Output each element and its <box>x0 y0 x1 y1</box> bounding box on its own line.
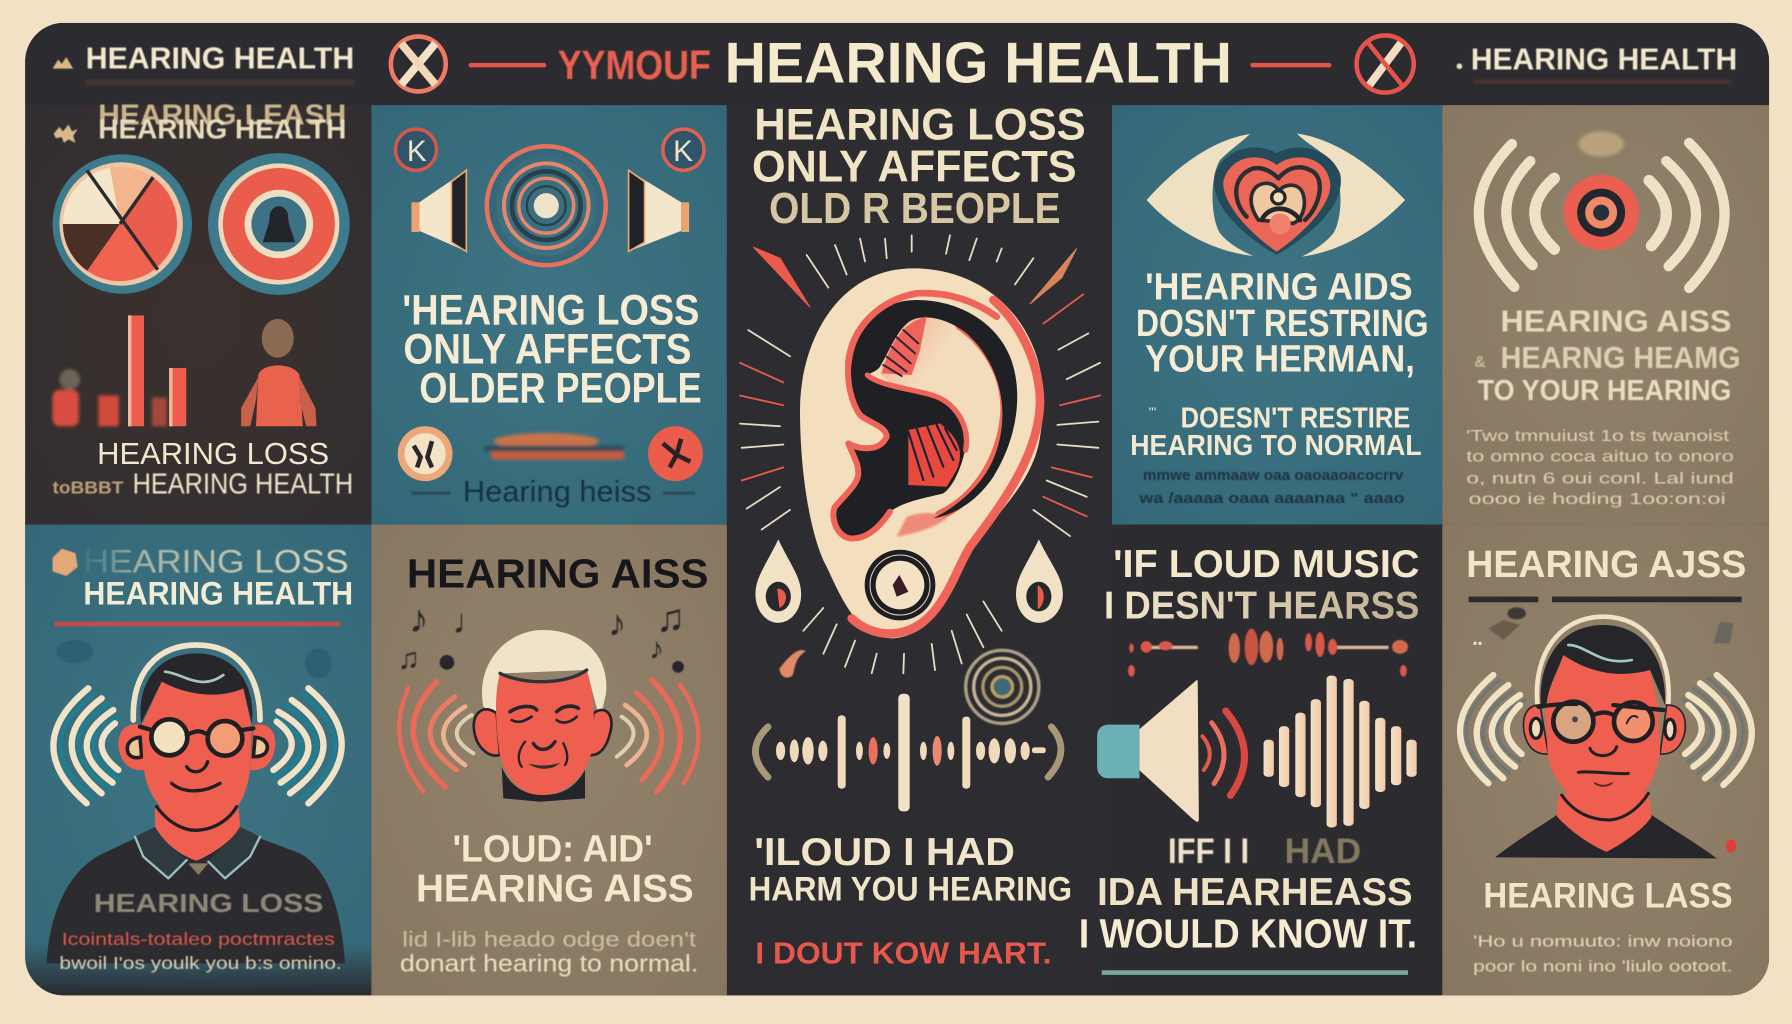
myth heading: & <box>1474 354 1486 371</box>
fine print: lid I-lib heado odge doen't <box>402 926 696 951</box>
icon: figure badge right <box>648 426 703 481</box>
blurred strip <box>485 433 624 459</box>
coral punchline: I DOUT KOW HART. <box>755 935 1051 970</box>
icon: speaker left <box>411 170 466 251</box>
icon: badge left: K <box>407 135 427 168</box>
arcs <box>1202 711 1244 795</box>
panel: younger person <box>25 525 371 995</box>
music notes: ♩ <box>453 603 487 641</box>
dark rules <box>1469 597 1742 602</box>
myth statement: HARM YOU HEARING <box>749 871 1072 909</box>
music notes: ♫ <box>398 643 420 676</box>
myth heading: ONLY AFFECTS <box>403 325 691 372</box>
sub statement: HEARING TO NORMAL <box>1130 430 1422 462</box>
myth statement <box>1079 831 1417 956</box>
fine print: 'Two tmnuiust 1o ts twanoist <box>1466 428 1730 445</box>
upper hatch <box>882 317 927 376</box>
music notes: ♪ <box>608 602 626 643</box>
caption: hearing health <box>52 472 352 494</box>
icon: drop right <box>1016 539 1063 623</box>
caption: hearing health: HEARING HEALTH <box>133 469 353 501</box>
red dot <box>1726 839 1736 853</box>
headband <box>1537 617 1669 703</box>
panel: charts <box>25 100 371 525</box>
fine print: poor lo noni ino 'liulo ootoot. <box>1473 958 1733 975</box>
music notes: ♪ <box>649 632 664 665</box>
myth heading: 'HEARING AIDS <box>1145 265 1413 307</box>
nose and mouth <box>187 762 208 772</box>
panel: loud music <box>1079 525 1442 995</box>
icon: hexagon mark <box>53 549 78 576</box>
ears <box>1523 705 1548 754</box>
caption: hearing health: toBBBT <box>53 478 124 498</box>
myth heading: DOSN'T RESTRING <box>1136 302 1429 344</box>
sound arcs <box>399 680 698 792</box>
myth heading: HEARNG HEAMG <box>1501 340 1741 375</box>
sub statement <box>1130 402 1422 462</box>
person figure <box>241 319 317 426</box>
bar chart <box>53 315 186 426</box>
heading: HEARING LOSS <box>83 544 349 580</box>
neck <box>155 803 240 861</box>
ears <box>474 709 500 756</box>
ear cavity <box>835 300 1017 539</box>
caption: hearing heiss <box>411 480 696 508</box>
myth heading: YOUR HERMAN, <box>1145 337 1415 379</box>
headband <box>133 645 260 720</box>
title prefix: YYMOUF <box>558 42 711 88</box>
face <box>1545 655 1660 809</box>
music notes <box>398 597 686 680</box>
icon: target dot <box>1563 175 1639 250</box>
pie chart <box>53 154 192 294</box>
overlapping heading: HEARING HEALTH <box>98 113 346 144</box>
myth statement: 'ILOUD I HAD <box>754 831 1015 874</box>
icon: crossed circle right <box>1357 35 1414 93</box>
equalizer bars <box>1264 675 1417 828</box>
blurred fine print: mmwe ammaaw oaa oaoaaoacocrrv <box>1143 468 1404 484</box>
heading: HEARING HEALTH <box>83 576 353 612</box>
ear canal ring <box>865 550 935 620</box>
icon: crossed circle left <box>391 37 446 91</box>
myth heading <box>754 108 1084 224</box>
neck <box>1557 792 1652 852</box>
caption: HEARING LASS <box>1483 875 1733 915</box>
header bar <box>25 23 1769 105</box>
music notes: ● <box>670 649 686 680</box>
panel: myth older people <box>371 105 727 525</box>
fine print: oooo ie hoding 1oo:on:oi <box>1469 491 1726 508</box>
fine print: donart hearing to normal. <box>400 950 698 977</box>
panel: older person <box>371 525 727 995</box>
glasses <box>1553 702 1593 742</box>
heading <box>1104 543 1419 627</box>
icon: speaker <box>1097 680 1199 822</box>
fine print <box>1473 933 1733 975</box>
icon: note accent <box>779 650 806 678</box>
music notes: ♪ <box>409 598 429 641</box>
myth heading: ONLY AFFECTS <box>752 143 1077 192</box>
icon: ear illustration <box>800 268 1043 638</box>
shirt caption: HEARING LOSS <box>94 888 323 918</box>
header left label <box>53 41 354 85</box>
myth heading <box>404 294 700 403</box>
sub statement: DOESN'T RESTIRE <box>1181 402 1410 434</box>
overlapping heading <box>53 104 346 144</box>
portrait: man with glasses <box>1460 607 1752 858</box>
main title: HEARING HEALTH <box>725 31 1232 95</box>
myth statement <box>749 831 1072 909</box>
icon: badge left <box>395 129 437 170</box>
sub statement: ''' <box>1149 405 1156 420</box>
myth heading: TO YOUR HEARING <box>1478 375 1731 407</box>
icon: badge right <box>663 129 704 170</box>
icon: eye and heart <box>1147 133 1405 257</box>
myth statement: 'LOUD: AID' <box>453 828 653 870</box>
icon: small rings <box>966 650 1039 723</box>
hair <box>1541 625 1665 705</box>
myth statement: IFF I I <box>1168 831 1249 871</box>
sound rays <box>740 235 1100 673</box>
red rule <box>54 622 341 626</box>
small blurred mark <box>1578 131 1624 157</box>
caption: hearing loss: HEARING LOSS <box>97 436 329 471</box>
icon: speaker right <box>629 170 689 251</box>
myth heading: OLDER PEOPLE <box>419 364 702 411</box>
myth statement: HAD <box>1285 831 1361 871</box>
blurred marks <box>1488 607 1733 643</box>
ears <box>118 724 145 770</box>
target chart <box>208 153 350 295</box>
myth statement: I WOULD KNOW IT. <box>1079 910 1417 956</box>
sound waveform <box>755 694 1061 811</box>
dark shirt base <box>25 943 371 995</box>
sound arcs <box>53 688 342 803</box>
overlapping heading: HEARING LEASH <box>98 100 346 132</box>
red rule right <box>1250 63 1331 67</box>
music notes: ♫ <box>656 597 685 640</box>
music notes: ● <box>437 642 457 680</box>
portrait: man with glasses <box>47 640 345 963</box>
panel: ear centerpiece <box>727 100 1112 995</box>
teal rule <box>1102 970 1408 975</box>
face <box>496 670 594 795</box>
icon: figure badge left <box>398 426 453 481</box>
blurred fine print: wa /aaaaa oaaa aaaanaa " aaao <box>1138 491 1405 507</box>
icon: sound target <box>487 146 606 265</box>
myth heading: HEARING LOSS <box>754 100 1086 149</box>
hair <box>140 653 252 723</box>
panel: person listening <box>1442 525 1769 995</box>
torso <box>47 827 345 963</box>
portrait: older man <box>399 630 698 802</box>
inner peach bowl <box>880 318 952 387</box>
icon: badge right: K <box>673 135 693 168</box>
heading: HEARING AJSS <box>1466 543 1746 585</box>
heading: HEARING AISS <box>407 550 709 596</box>
fine print: 'Ho u nomuuto: inw noiono <box>1473 933 1733 950</box>
panel: myth hearing aids <box>1112 105 1442 525</box>
myth heading: OLD R BEOPLE <box>769 185 1061 233</box>
myth heading <box>1136 265 1429 379</box>
cream fine print: bwoil I'os youlk you b:s omino. <box>59 953 342 973</box>
face <box>142 682 252 825</box>
myth statement <box>416 828 694 911</box>
myth statement: HEARING AISS <box>416 868 694 911</box>
nose and mouth <box>1590 747 1617 756</box>
header left label: HEARING HEALTH <box>86 41 354 76</box>
glasses <box>151 719 187 755</box>
heading: I DESN'T HEARSS <box>1104 584 1419 627</box>
heading: 'IF LOUD MUSIC <box>1113 543 1419 586</box>
icon: drop left <box>755 539 801 623</box>
lower hatch <box>908 423 960 487</box>
myth heading: 'HEARING LOSS <box>402 287 699 334</box>
neck <box>502 767 585 802</box>
sound arcs and bars <box>1202 675 1417 828</box>
myth heading <box>1474 303 1741 407</box>
torso <box>1495 815 1717 858</box>
blurred fine print <box>1138 468 1405 507</box>
header right label: HEARING HEALTH <box>1471 42 1737 77</box>
fine print <box>400 926 698 977</box>
sound arcs <box>1460 675 1752 785</box>
features <box>510 706 578 712</box>
heading <box>83 544 353 612</box>
panel: sound waves <box>1442 105 1769 525</box>
myth heading: HEARING AISS <box>1501 303 1731 338</box>
caption: hearing heiss: Hearing heiss <box>463 476 651 509</box>
fine print: o, nutn 6 oui conl. Lal iund <box>1466 470 1734 487</box>
fine print <box>1466 428 1734 508</box>
blurred coral waveform <box>1128 629 1408 677</box>
myth statement: IDA HEARHEASS <box>1097 871 1413 914</box>
collar <box>135 827 260 878</box>
hair <box>482 630 606 720</box>
blurred marks <box>57 640 332 678</box>
red rule left <box>469 63 546 67</box>
coral fine print: Icointals-totaleo poctmractes <box>62 929 335 949</box>
sound wave arcs <box>1479 143 1725 288</box>
fine print: to omno coca aituo to onoro <box>1466 449 1734 466</box>
